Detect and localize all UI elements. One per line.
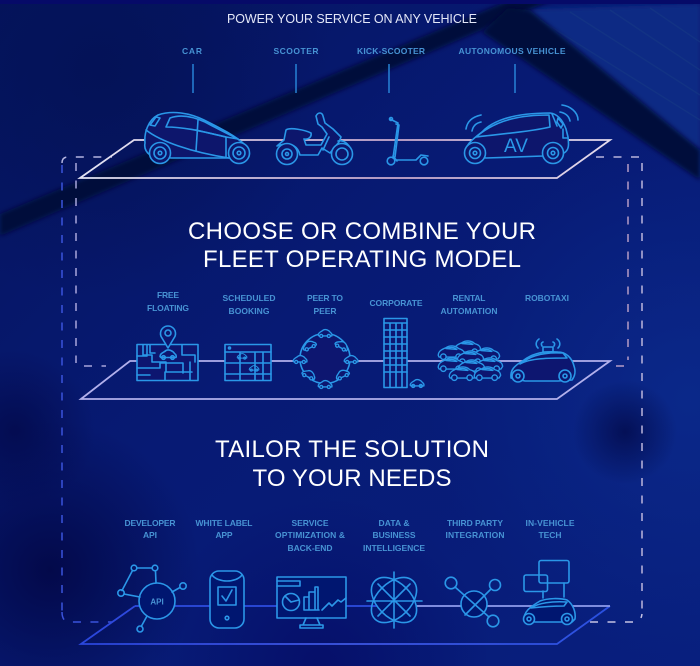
title: POWER YOUR SERVICE ON ANY VEHICLE [227, 12, 477, 26]
label: developer api: API [143, 530, 157, 540]
label: developer api: DEVELOPER [124, 518, 176, 528]
label: in-vehicle tech: IN-VEHICLE [526, 518, 575, 528]
icon: calendar [225, 344, 271, 380]
foreground artwork [62, 12, 642, 644]
icon: autonomous car [464, 105, 578, 164]
label: peer to peer [307, 293, 343, 316]
label: peer to peer: PEER [314, 306, 336, 316]
platform 3 [81, 606, 610, 644]
label: corporate: CORPORATE [370, 298, 423, 308]
label: car [182, 46, 202, 93]
label: in-vehicle tech: TECH [538, 530, 562, 540]
icon: robotaxi [511, 339, 575, 382]
label: kick-scooter: KICK-SCOOTER [357, 46, 425, 56]
label: white label app: WHITE LABEL [196, 518, 252, 528]
label: white label app: APP [216, 530, 233, 540]
label: developer api [124, 518, 176, 540]
label: white label app [196, 518, 252, 540]
icon: kick-scooter [387, 118, 428, 165]
label: scheduled booking: SCHEDULED [222, 293, 276, 303]
label: rental automation: AUTOMATION [440, 306, 498, 316]
icon: api network [118, 565, 186, 632]
section: vehicles [80, 46, 610, 178]
section: operating models [81, 290, 610, 399]
label: rental automation: RENTAL [452, 293, 486, 303]
label: autonomous vehicle: AUTONOMOUS VEHICLE [458, 46, 566, 56]
label: in-vehicle tech [526, 518, 575, 540]
label: data and business intelligence: INTELLIGENCE [363, 543, 425, 553]
heading: fleet operating model [188, 218, 536, 273]
label: free floating: FLOATING [147, 303, 189, 313]
label: car: CAR [182, 46, 202, 56]
icon: scooter [276, 113, 352, 164]
heading: fleet operating model: FLEET OPERATING MODEL [203, 246, 521, 273]
label: third party integration: THIRD PARTY [447, 518, 503, 528]
icon: in-vehicle tech [524, 560, 575, 624]
icon: rental fleet [438, 341, 503, 380]
label: autonomous vehicle [458, 46, 566, 93]
dashed connector frame [62, 157, 642, 622]
icon: corporate tower [384, 318, 424, 388]
heading: tailor the solution [215, 436, 489, 492]
label: robotaxi: ROBOTAXI [525, 293, 569, 303]
icon: globe [363, 569, 425, 631]
label: rental automation [440, 293, 498, 316]
icon: api network: API [150, 598, 164, 606]
label: service optimization: SERVICE [292, 518, 329, 528]
label: scheduled booking: BOOKING [228, 306, 270, 316]
label: third party integration: INTEGRATION [446, 530, 504, 540]
icon: map with pin [137, 326, 198, 380]
heading: fleet operating model: CHOOSE OR COMBINE YOUR [188, 218, 536, 245]
label: third party integration [446, 518, 504, 540]
icon: car [145, 113, 250, 164]
heading: tailor the solution: TAILOR THE SOLUTION [215, 436, 489, 463]
heading: tailor the solution: TO YOUR NEEDS [252, 465, 452, 492]
icon: integration hub [445, 577, 500, 627]
icon: peer ring [293, 330, 358, 389]
label: service optimization: BACK-END [288, 543, 332, 553]
label: free floating: FREE [157, 290, 179, 300]
icon: dashboard monitor [277, 577, 346, 628]
label: service optimization [275, 518, 345, 553]
label: data and business intelligence: BUSINESS [372, 530, 416, 540]
platform 2 [81, 361, 610, 399]
section: solutions [81, 518, 610, 644]
platform 1 [80, 140, 610, 178]
label: kick-scooter [357, 46, 425, 93]
label: scooter: SCOOTER [274, 46, 318, 56]
icon: phone [210, 571, 244, 628]
label: service optimization: OPTIMIZATION & [275, 530, 345, 540]
label: free floating [147, 290, 189, 313]
label: scooter [274, 46, 318, 93]
icon: autonomous car: AV [504, 136, 528, 157]
label: peer to peer: PEER TO [307, 293, 343, 303]
label: data and business intelligence [363, 518, 425, 553]
label: data and business intelligence: DATA & [378, 518, 410, 528]
label: scheduled booking [222, 293, 276, 316]
